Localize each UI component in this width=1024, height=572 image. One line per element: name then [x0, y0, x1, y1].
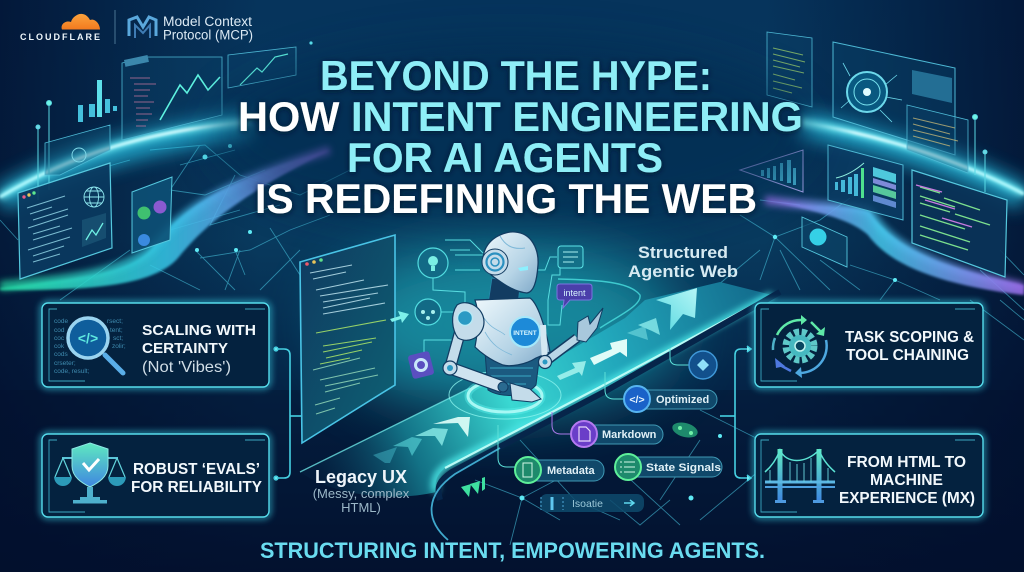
card text: [839, 454, 975, 507]
MCP wordmark: [163, 14, 253, 42]
pill: metadata: [498, 425, 604, 483]
code snippet text: cok: [54, 343, 65, 350]
radial target window: [833, 42, 955, 155]
title: BEYOND THE HYPE:: [320, 52, 712, 99]
pill: optimized: Optimized: [656, 394, 709, 406]
icon: magnifying glass: [68, 318, 123, 373]
base ring: [449, 371, 561, 419]
code snippet text: crseter;: [54, 360, 76, 367]
pill: isolate: Isoatie: [572, 498, 603, 510]
triangular bar chart: [740, 150, 803, 192]
chest emblem: [510, 317, 540, 347]
right floating data panels: [740, 32, 1007, 277]
bar chart: [78, 80, 117, 122]
card text: CERTAINTY: [142, 340, 228, 357]
pill: metadata: Metadata: [547, 465, 596, 477]
connector: left cards: [274, 347, 301, 480]
icon: magnifying glass: </>: [78, 330, 98, 346]
bar and strip chart window: [828, 145, 903, 220]
left floating data panels: [18, 47, 296, 279]
title: HOW INTENT ENGINEERING: [238, 93, 803, 140]
MCP wordmark: Model Context: [163, 14, 252, 29]
code and line chart window: [122, 55, 222, 140]
legacy HTML code window: [300, 235, 395, 443]
neck: [488, 278, 520, 305]
signal poles: [36, 100, 52, 200]
head: [482, 232, 538, 293]
icon: Cloudflare cloud: [62, 14, 100, 30]
arrow: large: [656, 288, 697, 330]
label: legacy UX: Legacy UX: [315, 467, 407, 487]
pill: isolate: [540, 494, 644, 512]
chevrons: lower road: [373, 417, 470, 463]
right arm: [538, 308, 603, 368]
code snippet text: code: [54, 318, 68, 325]
icon: small green chevrons: [461, 477, 485, 497]
title: IS REDEFINING THE WEB: [255, 175, 757, 222]
torso: [475, 298, 550, 366]
icon: focus node: [670, 348, 717, 379]
arrow: small: [557, 361, 586, 380]
code snippet text: [54, 318, 126, 375]
arrow: medium: [590, 339, 627, 365]
signal poles: [972, 114, 987, 192]
robot agent: [443, 232, 603, 419]
code snippet text: zolir;: [112, 343, 126, 350]
card text: MACHINE: [870, 472, 943, 489]
card text: FROM HTML TO: [847, 454, 966, 471]
intent speech bubble: [557, 284, 592, 308]
label: structured agentic web: Structured: [638, 243, 728, 262]
globe window: [45, 125, 110, 175]
app icon window: [132, 177, 172, 253]
pill: state signals: State Signals: [646, 462, 721, 474]
card text: SCALING WITH: [142, 322, 256, 339]
code window: [767, 32, 812, 107]
card text: [142, 322, 256, 376]
code snippet text: coc: [54, 335, 65, 342]
chest emblem: INTENT: [513, 330, 537, 337]
card text: FOR RELIABILITY: [131, 479, 263, 496]
code snippet text: tent;: [110, 327, 123, 334]
code snippet text: code, result;: [54, 368, 90, 375]
intent speech bubble: intent: [563, 288, 586, 298]
pill: state signals: [615, 454, 722, 480]
card text: ROBUST ‘EVALS’: [133, 461, 260, 478]
card text: EXPERIENCE (MX): [839, 490, 975, 507]
icon: network: [415, 299, 441, 325]
card text: TOOL CHAINING: [846, 347, 969, 364]
glowing horizon arc: right: [800, 122, 1024, 198]
connector: right cards: [720, 346, 751, 481]
code snippet text: cod: [54, 327, 65, 334]
upper line chart window: [228, 47, 296, 88]
data wave: left: [0, 150, 330, 290]
panel: html to machine experience: [755, 434, 983, 517]
pill: optimized: </>: [629, 394, 645, 406]
data wave: right: [765, 200, 1024, 295]
title: FOR AI AGENTS: [347, 134, 663, 181]
title backdrop shade: [212, 40, 812, 230]
code snippet text: cods: [54, 351, 68, 358]
code snippet text: sct;: [113, 335, 123, 342]
card text: (Not 'Vibes'): [142, 359, 231, 376]
label: legacy UX: (Messy, complex: [313, 486, 410, 501]
icon: settings gear: [407, 351, 435, 379]
brand logos: [20, 14, 253, 43]
chevrons: upper road: [627, 318, 660, 340]
card text: [131, 461, 263, 496]
card text: [845, 329, 974, 364]
arrow: code window to agent: [390, 311, 409, 323]
label: legacy UX: [313, 467, 410, 515]
footer tagline: STRUCTURING INTENT, EMPOWERING AGENTS.: [260, 538, 765, 563]
direction arrows on road: [373, 288, 697, 463]
pill: optimized: [605, 372, 717, 412]
label: structured agentic web: [628, 243, 738, 281]
report window: [907, 105, 968, 173]
icon: MCP mark: [129, 17, 156, 38]
icon: shield and scales: [54, 443, 126, 504]
icon: lightbulb: [418, 248, 448, 278]
network nodes: [195, 41, 897, 501]
Cloudflare wordmark: CLOUDFLARE: [20, 32, 100, 42]
panel: robust evals: [42, 434, 269, 517]
title: [238, 52, 803, 222]
left arm: [443, 303, 541, 402]
code snippet text: rsect;: [107, 318, 123, 325]
glowing horizon arc: left: [0, 122, 250, 200]
icon: document: [558, 246, 583, 268]
icon: green capsule: [671, 420, 699, 440]
panel: task scoping: [755, 303, 983, 387]
icon: gear with cycle arrows: [773, 315, 827, 378]
icon: bridge: [765, 449, 835, 503]
phone window: [802, 217, 847, 267]
network mesh lines: [0, 145, 1024, 545]
agent tool icons and circuits: [407, 240, 592, 379]
large code window: [912, 170, 1007, 277]
road platform: [300, 279, 780, 540]
card text: TASK SCOPING &: [845, 329, 974, 346]
MCP wordmark: Protocol (MCP): [163, 28, 253, 42]
panel: scaling with certainty: [42, 303, 269, 387]
pill: markdown: Markdown: [602, 429, 657, 441]
label: structured agentic web: Agentic Web: [628, 262, 738, 281]
main code window: [18, 163, 112, 279]
pill: markdown: [552, 412, 663, 447]
abdomen: [485, 352, 540, 395]
label: legacy UX: HTML): [341, 500, 381, 515]
